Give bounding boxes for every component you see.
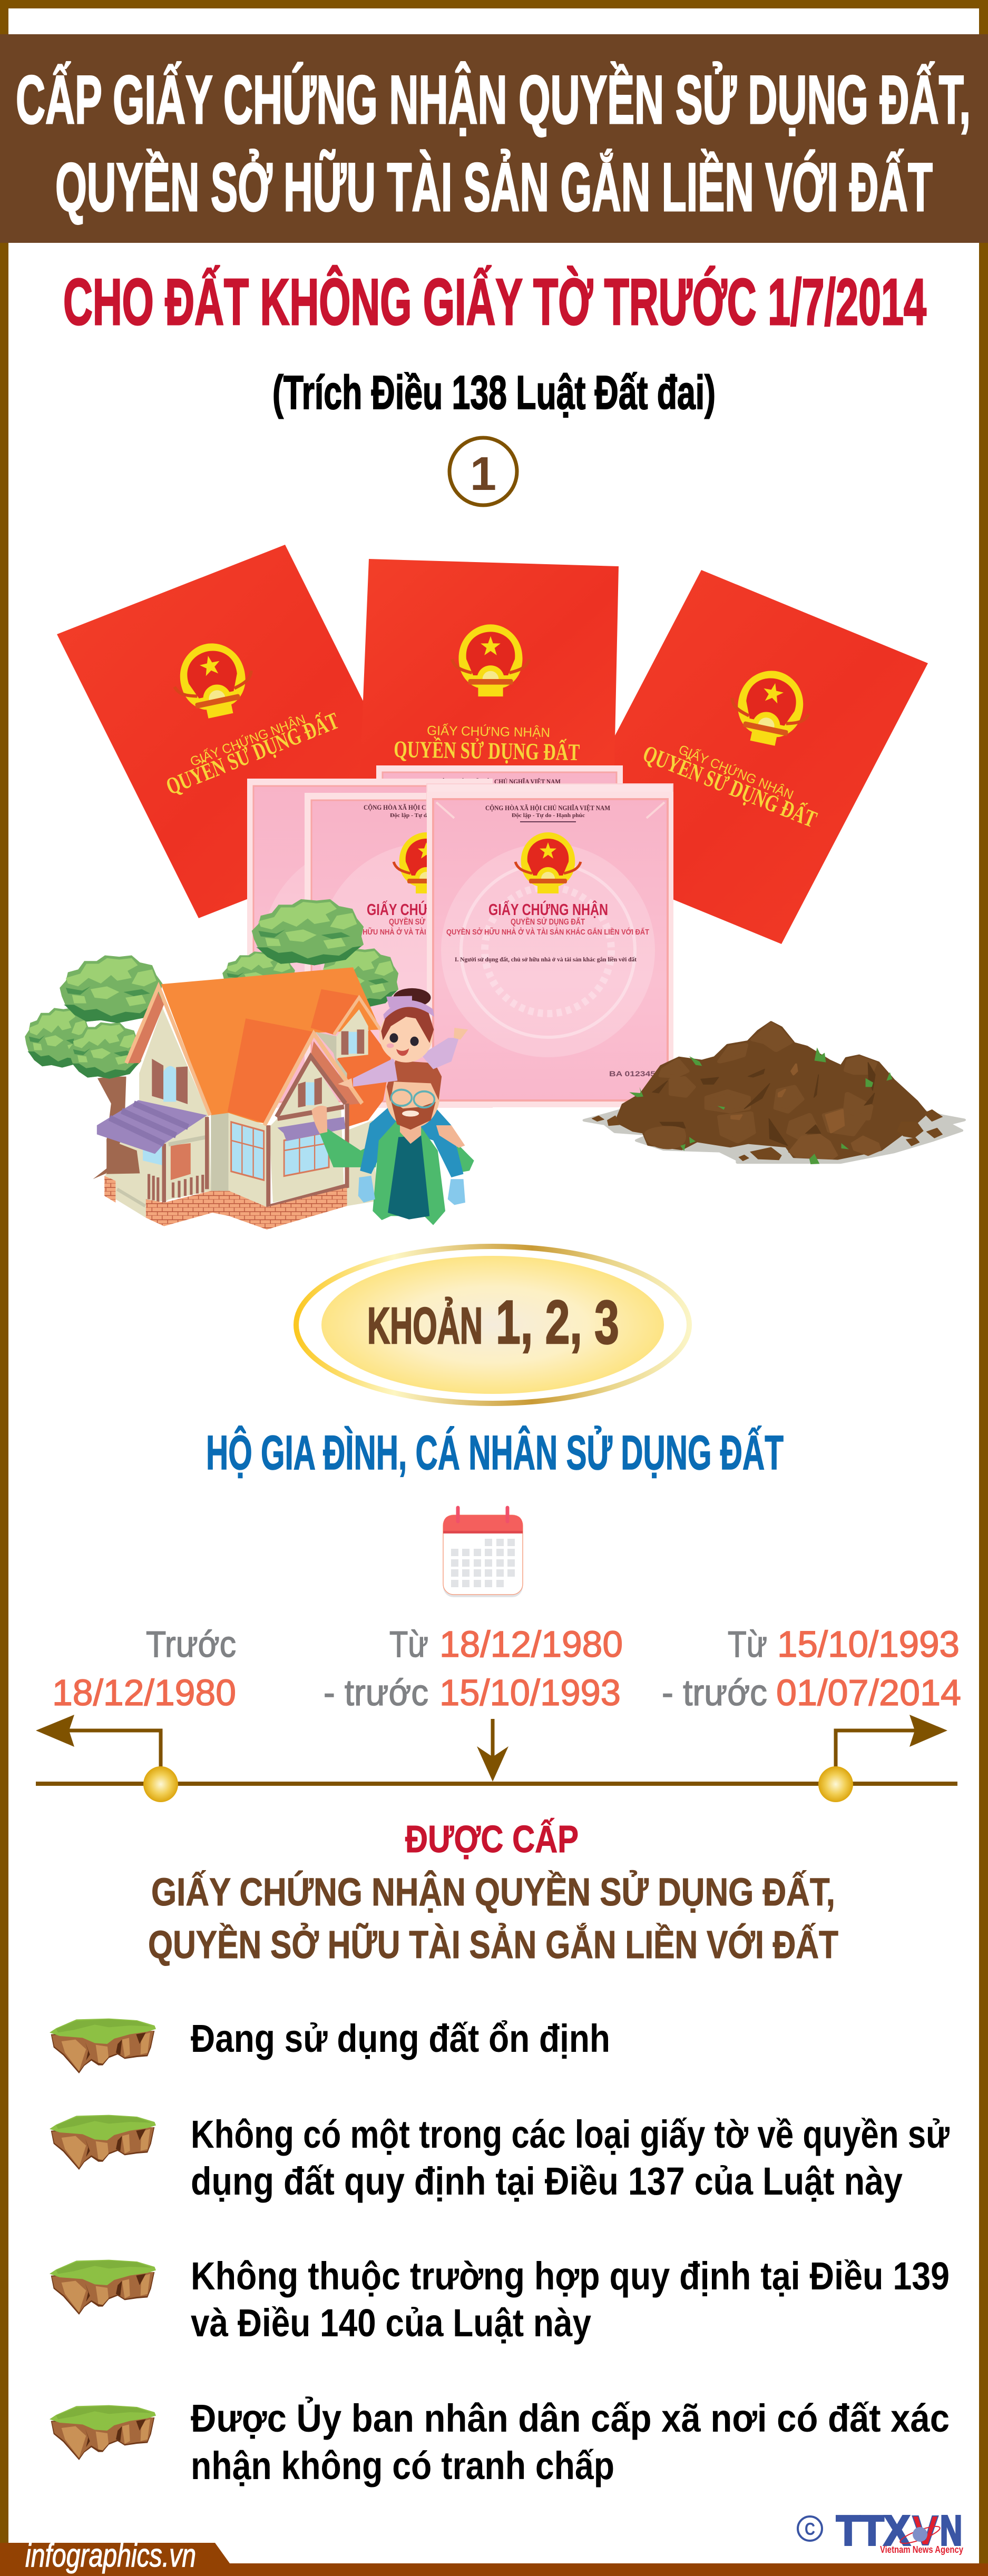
period 3 label: - trước [662,1672,767,1713]
house [97,967,391,1230]
certificate back top: CỘNG HÒA XÃ HỘI CHỦ NGHĨA VIỆT NAM [437,778,561,785]
red book centre: QUYỀN SỬ DỤNG ĐẤT [394,736,580,765]
condition 1 text: Đang sử dụng đất ổn định [191,2017,610,2060]
granted heading: ĐƯỢC CẤP [405,1818,579,1861]
certificate middle left: GIẤY CHỨNG NHẬN [367,900,486,919]
red book left: GIẤY CHỨNG NHẬN [188,711,308,770]
certificate front: BA 012345 [609,1069,656,1078]
agency logo [798,2507,963,2555]
period 2 label: 15/10/1993 [439,1672,621,1713]
illustration: red certificate books [57,545,928,944]
period 1 label [52,1624,236,1713]
illustration: pink certificates [247,765,673,1108]
red book left [57,545,427,918]
red book centre [359,559,619,790]
condition 2 text [191,2112,950,2203]
red book right: QUYỀN SỬ DỤNG ĐẤT [639,740,820,833]
agency logo: N [940,2507,962,2554]
certificate middle left: Độc lập - Tự do - Hạnh phúc [390,812,464,819]
condition 4 text [191,2396,950,2487]
certificate middle left: QUYỀN SỞ HỮU NHÀ Ở VÀ TÀI SẢN KHÁC GẮN LIỀN VỚI ĐẤT [325,927,527,937]
condition 4 [50,2396,950,2487]
source note: (Trích Điều 138 Luật Đất đai) [272,367,716,419]
badge: clause numbers [296,1246,689,1403]
tree left [25,955,162,1179]
timeline node left [143,1766,178,1802]
condition 3 text: và Điều 140 của Luật này [191,2301,591,2345]
badge: clause numbers: 1, 2, 3 [496,1287,619,1356]
tree right [222,899,398,1008]
condition 1 [50,2017,610,2073]
arrow down [477,1719,508,1782]
certificate front: QUYỀN SỬ DỤNG ĐẤT [511,917,585,927]
certificate middle left [305,793,533,1106]
arrow right [836,1715,947,1770]
period 3 label: 15/10/1993 [777,1624,960,1665]
timeline with arrows [36,1715,957,1802]
condition 2 [50,2112,950,2203]
certificate front: CỘNG HÒA XÃ HỘI CHỦ NGHĨA VIỆT NAM [485,804,610,812]
icon: land island [50,2260,156,2315]
condition 4 text: nhận không có tranh chấp [191,2444,614,2487]
icon: land island [50,2115,156,2170]
agency logo: V [912,2507,938,2554]
agency logo: Vietnam News Agency [880,2544,963,2555]
red book right [555,570,928,944]
certificate back left [247,779,493,1108]
period 2 label: Từ [389,1624,428,1665]
certificate front: GIẤY CHỨNG NHẬN [488,900,608,919]
period 3 label: 01/07/2014 [776,1672,961,1713]
certificate back top: Độc lập - Tự do - Hạnh phúc [462,786,536,792]
certificate front: I. Người sử dụng đất, chủ sở hữu nhà ở và tài sản khác gắn liền với đất [455,956,637,963]
red book centre: GIẤY CHỨNG NHẬN [427,723,550,740]
certificate back top [376,765,623,1103]
certificate name: GIẤY CHỨNG NHẬN QUYỀN SỬ DỤNG ĐẤT, [151,1870,835,1914]
period 2 label [324,1624,623,1713]
certificate front: QUYỀN SỞ HỮU NHÀ Ở VÀ TÀI SẢN KHÁC GẮN LIỀN VỚI ĐẤT [446,927,649,937]
agency logo: TTX [836,2507,910,2554]
number badge: 1 [470,448,496,500]
period 2 label: - trước [324,1672,428,1713]
illustration: pile of soil [584,1022,964,1164]
certificate name [148,1870,838,1967]
red book right: GIẤY CHỨNG NHẬN [677,742,796,803]
icon: calendar [443,1508,523,1597]
condition 2 text: dụng đất quy định tại Điều 137 của Luật này [191,2159,903,2203]
certificate name: QUYỀN SỞ HỮU TÀI SẢN GẮN LIỀN VỚI ĐẤT [148,1923,838,1967]
icon: land island [50,2405,156,2460]
daughter [338,988,468,1088]
condition 3 [50,2254,950,2345]
period 3 label [662,1624,961,1713]
title banner [0,34,988,243]
timeline node right [818,1766,853,1802]
period 1 label: Trước [146,1624,236,1665]
period 1 label: 18/12/1980 [52,1672,236,1713]
red book left: QUYỀN SỬ DỤNG ĐẤT [162,707,343,800]
certificate behind front [427,784,673,815]
footer bar with site name [0,2538,988,2576]
family: father carrying daughter [311,988,474,1225]
period 3 label: Từ [728,1624,767,1665]
father [311,1060,474,1225]
number badge [449,438,517,505]
arrow left [36,1715,161,1770]
certificate middle left: CỘNG HÒA XÃ HỘI CHỦ NGHĨA VIỆT NAM [364,803,488,811]
badge: clause numbers: KHOẢN [367,1297,483,1354]
certificate front: Độc lập - Tự do - Hạnh phúc [512,812,585,819]
icon: land island [50,2019,156,2073]
period 2 label: 18/12/1980 [439,1624,623,1665]
footer bar with site name: infographics.vn [25,2538,196,2574]
certificate middle left: QUYỀN SỬ DỤNG ĐẤT [389,917,463,927]
condition 3 text [191,2254,950,2345]
illustration: house, trees and family [25,899,474,1230]
certificate front [427,792,673,1107]
agency logo: C [805,2519,815,2539]
